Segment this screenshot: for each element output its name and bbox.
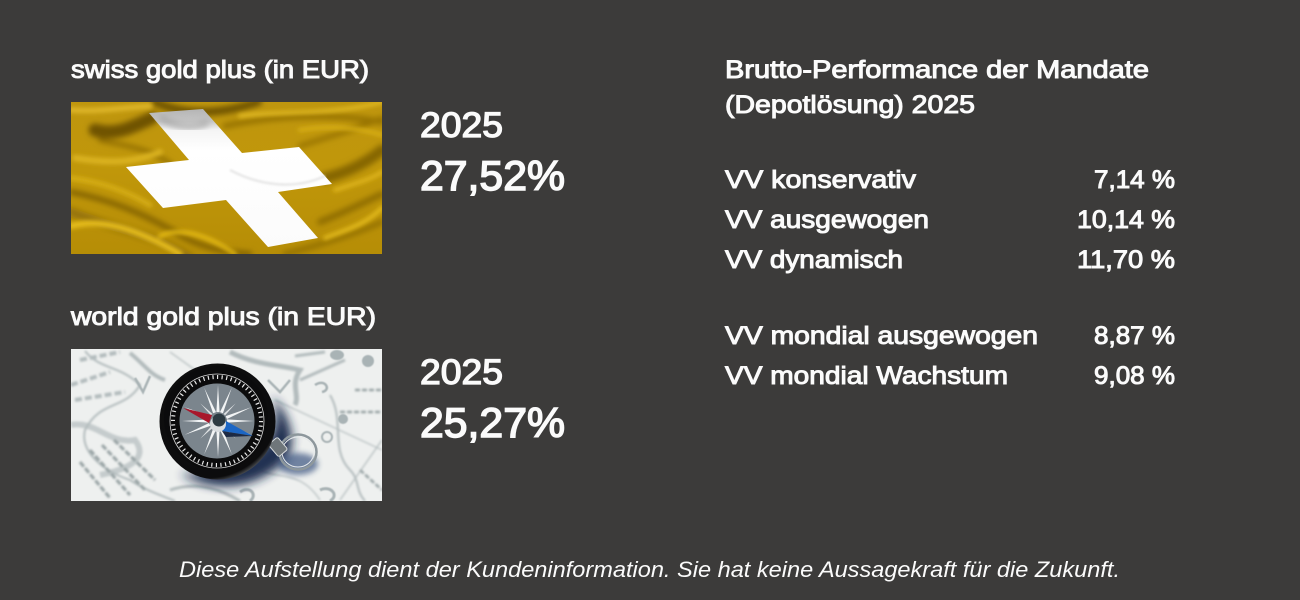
compass rose [180, 384, 254, 458]
heading: swiss gold plus: swiss gold plus (in EUR) [71, 56, 369, 84]
year label: 2025 [420, 106, 503, 145]
image: gold Swiss flag [71, 102, 382, 258]
row: VV dynamisch [725, 246, 1175, 274]
row: VV mondial ausgewogen [725, 322, 1175, 350]
row: VV ausgewogen: VV ausgewogen [725, 206, 929, 234]
row: VV dynamisch: 11,70 % [1077, 246, 1175, 274]
row: VV ausgewogen [725, 206, 1175, 234]
compass body [160, 364, 276, 480]
row: VV mondial Wachstum: 9,08 % [1094, 362, 1175, 390]
performance value: 25,27% [420, 399, 565, 446]
footer disclaimer: Diese Aufstellung dient der Kundeninformation. Sie hat keine Aussagekraft für die Zukunft. [179, 557, 1120, 582]
white cross [126, 109, 332, 247]
panel: swiss gold plus [71, 56, 382, 258]
row: VV ausgewogen: 10,14 % [1077, 206, 1175, 234]
year label: 2025 [420, 353, 503, 392]
panel: Brutto-Performance table [725, 56, 1175, 390]
panel: world gold plus figures [420, 353, 565, 446]
row: VV mondial Wachstum: VV mondial Wachstum [725, 362, 1008, 390]
row: VV konservativ: 7,14 % [1094, 166, 1175, 194]
compass dial ticks [170, 374, 264, 468]
row: VV mondial ausgewogen: VV mondial ausgewogen [725, 322, 1038, 350]
map contours [71, 351, 382, 501]
row: VV mondial ausgewogen: 8,87 % [1094, 322, 1175, 350]
panel: world gold plus [70, 303, 382, 501]
heading: world gold plus: world gold plus (in EUR) [70, 303, 376, 331]
row: VV dynamisch: VV dynamisch [725, 246, 903, 274]
table heading [725, 56, 1149, 119]
row: VV mondial Wachstum [725, 362, 1175, 390]
image: compass on map [71, 349, 382, 501]
compass shadow [180, 396, 292, 486]
performance value: 27,52% [420, 152, 565, 199]
table heading: Brutto-Performance der Mandate [725, 56, 1149, 84]
panel: swiss gold plus figures [420, 106, 565, 199]
compass needle [183, 408, 212, 423]
table heading: (Depotlösung) 2025 [725, 91, 975, 119]
row: VV konservativ [725, 166, 1175, 194]
row: VV konservativ: VV konservativ [725, 166, 917, 194]
compass ring [280, 434, 316, 470]
